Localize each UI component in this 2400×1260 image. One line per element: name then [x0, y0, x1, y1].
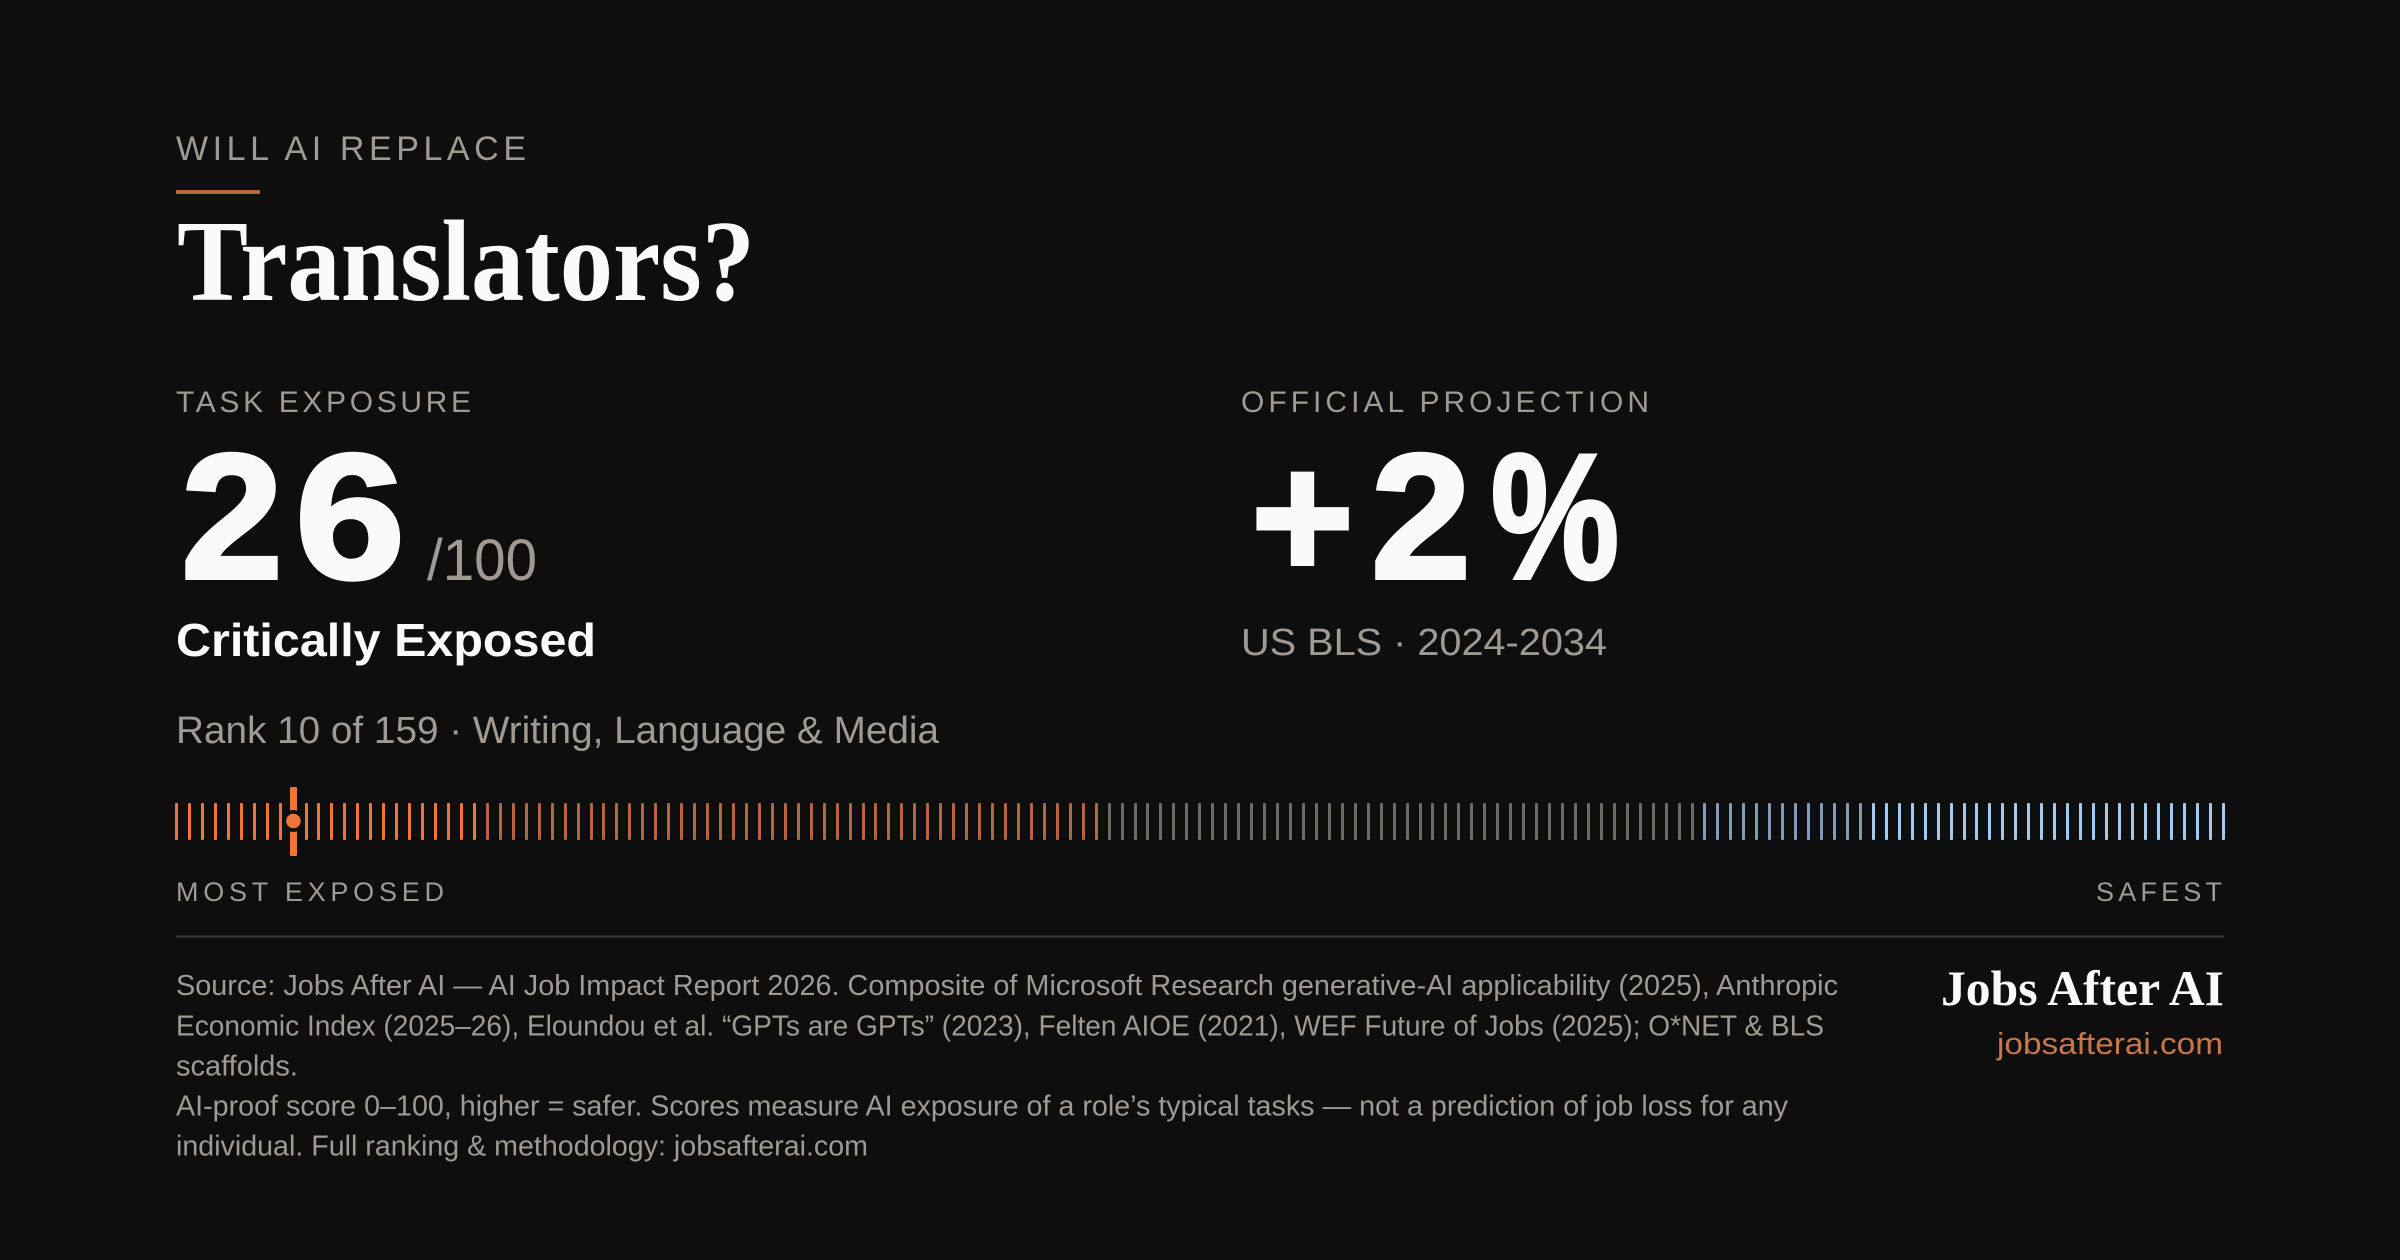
strip label: safest: SAFEST — [2096, 877, 2222, 907]
title: Translators? — [177, 198, 755, 326]
source notes: AI-proof score 0–100, higher = safer. Scores measure AI exposure of a role’s typical tasks — not a prediction of job loss for any — [176, 1090, 1788, 1122]
source notes: scaffolds. — [176, 1050, 298, 1082]
source notes: individual. Full ranking & methodology: jobsafterai.com — [176, 1130, 868, 1162]
footer divider — [176, 936, 2224, 938]
score: 26: 2 — [181, 417, 283, 616]
marker: rank 10 position — [286, 787, 301, 856]
accent rule — [176, 190, 260, 194]
projection value — [1251, 417, 1619, 616]
severity label: Critically Exposed — [176, 614, 596, 666]
rank and category: Rank 10 of 159 · Writing, Language & Media — [176, 710, 940, 752]
projection source: US BLS · 2024-2034 — [1241, 622, 1607, 664]
score: 26: 6 — [295, 417, 405, 616]
brand url: jobsafterai.com — [1996, 1026, 2223, 1061]
source notes — [176, 970, 1838, 1162]
strip label: most exposed: MOST EXPOSED — [176, 877, 444, 907]
source notes: Economic Index (2025–26), Eloundou et al. “GPTs are GPTs” (2023), Felten AIOE (2021), WEF Future of Jobs (2025); O*NET & BLS — [176, 1010, 1824, 1042]
label: official projection: OFFICIAL PROJECTION — [1241, 386, 1649, 419]
projection value: 2 — [1371, 417, 1471, 616]
exposure strip: 159 occupations — [175, 803, 2225, 840]
brand name: Jobs After AI — [1941, 960, 2224, 1016]
source notes: Source: Jobs After AI — AI Job Impact Report 2026. Composite of Microsoft Research generative-AI applicability (2025), Anthropic — [176, 970, 1838, 1002]
eyebrow: will AI replace: WILL AI REPLACE — [176, 130, 526, 168]
projection value: + — [1251, 417, 1354, 616]
score: 26 — [181, 417, 405, 616]
score denominator: /100 — [427, 528, 537, 593]
projection value: % — [1491, 417, 1619, 616]
label: task exposure: TASK EXPOSURE — [176, 386, 471, 419]
